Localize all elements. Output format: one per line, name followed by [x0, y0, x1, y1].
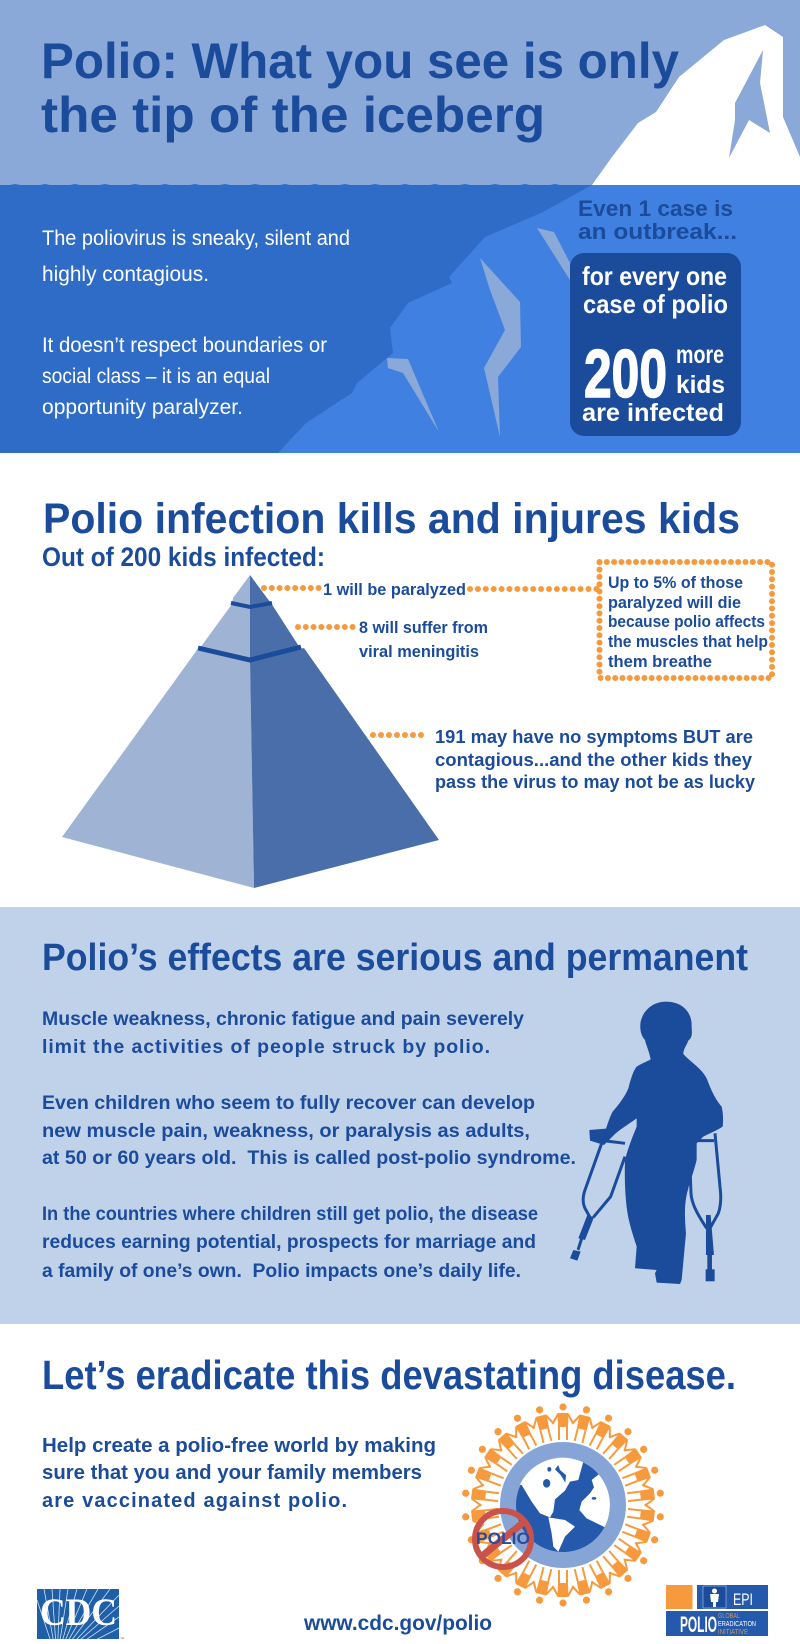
logo: polio eradication initiative — [666, 1585, 768, 1637]
action text — [42, 1435, 436, 1512]
logo: polio eradication initiative: ERADICATION — [718, 1619, 756, 1628]
subheading: Out of 200 kids infected: — [42, 542, 325, 572]
paragraph: weakness: limit the activities of people struck by polio. — [42, 1036, 490, 1058]
intro text: opportunity paralyzer. — [42, 396, 243, 419]
paragraph: daily life: reduces earning potential, prospects for marriage and — [42, 1231, 536, 1253]
panel: effects — [0, 907, 800, 1324]
callout: 200 more kids — [570, 253, 741, 436]
paragraph: weakness: Muscle weakness, chronic fatigue and pain severely — [42, 1008, 524, 1030]
ring of people — [461, 1403, 665, 1607]
callout: 200 more kids: are infected — [582, 399, 724, 427]
leader: 191 no symptoms — [373, 732, 429, 738]
paragraph: daily life — [42, 1203, 538, 1282]
paragraph: daily life: a family of one’s own. Polio impacts one’s daily life. — [42, 1260, 521, 1282]
intro text — [42, 227, 350, 419]
no polio sign — [475, 1511, 531, 1567]
action text: sure that you and your family members — [42, 1462, 422, 1484]
logo: CDC: CDC — [40, 1591, 117, 1634]
pyramid chart — [62, 575, 439, 888]
iceberg top crevice — [729, 50, 770, 158]
callout: 200 more kids: kids — [676, 371, 725, 399]
outbreak heading: Even 1 case is — [578, 196, 733, 221]
panel background — [0, 907, 800, 1324]
iceberg above water — [592, 25, 800, 185]
title: the tip of the iceberg — [41, 87, 545, 143]
callout: 200 more kids: more — [676, 341, 724, 369]
water background — [0, 185, 800, 453]
website url: www.cdc.gov/polio — [303, 1612, 492, 1635]
title: Polio: What you see is only — [41, 33, 679, 89]
logo: polio eradication initiative: GLOBAL — [718, 1611, 740, 1620]
outbreak heading — [578, 196, 737, 244]
callout: up to 5% will die: Up to 5% of those — [608, 573, 743, 592]
label: viral meningitis: viral meningitis — [359, 642, 479, 661]
label: 1 will be paralyzed: 1 will be paralyzed — [323, 580, 466, 599]
logo: CDC: ™ — [120, 1636, 124, 1641]
paragraph: post-polio syndrome: new muscle pain, weakness, or paralysis as adults, — [42, 1120, 530, 1142]
paragraph: post-polio syndrome: at 50 or 60 years old. This is called post-polio syndrome. — [42, 1147, 576, 1169]
leader to death box — [470, 586, 597, 592]
label: 191 no symptoms: contagious...and the other kids they — [435, 750, 752, 770]
action text: are vaccinated against polio. — [42, 1490, 347, 1512]
waterline ripples — [0, 184, 592, 186]
callout: 200 more kids: 200 — [584, 336, 667, 412]
outbreak heading: an outbreak... — [578, 219, 737, 244]
icon: child on crutches — [570, 1002, 723, 1284]
no polio sign: POLIO — [476, 1529, 530, 1548]
paragraph: post-polio syndrome: Even children who seem to fully recover can develop — [42, 1092, 535, 1114]
label: viral meningitis — [359, 618, 488, 661]
heading: Polio’s effects are serious and permanent — [42, 937, 748, 979]
callout: up to 5% will die: the muscles that help — [608, 632, 768, 651]
callout: 200 more kids: for every one — [582, 261, 727, 291]
label: 191 no symptoms — [435, 727, 755, 792]
heading: Polio infection kills and injures kids — [43, 495, 740, 543]
panel: iceberg header — [0, 0, 800, 453]
intro text: It doesn’t respect boundaries or — [42, 334, 327, 357]
callout: 200 more kids: case of polio — [583, 289, 728, 319]
intro text: social class – it is an equal — [42, 365, 270, 388]
callout: up to 5% will die: paralyzed will die — [608, 593, 741, 612]
globe ring — [508, 1450, 618, 1560]
panel: infection outcomes — [42, 495, 772, 888]
label: 191 no symptoms: 191 may have no symptoms BUT are — [435, 727, 753, 747]
intro text: The poliovirus is sneaky, silent and — [42, 227, 350, 250]
label: 191 no symptoms: pass the virus to may not be as lucky — [435, 772, 755, 792]
panel: call to action — [37, 1352, 768, 1644]
leader: 1 will be paralyzed — [264, 585, 319, 591]
title — [41, 33, 679, 143]
globe land — [520, 1458, 610, 1552]
leader: 8 will suffer — [298, 624, 353, 630]
paragraph: weakness — [42, 1008, 524, 1058]
paragraph: post-polio syndrome — [42, 1092, 576, 1169]
icon: people ring around globe — [461, 1403, 665, 1607]
logo: polio eradication initiative: EPI — [733, 1590, 753, 1609]
callout: up to 5% will die — [600, 562, 772, 678]
intro text: highly contagious. — [42, 263, 209, 286]
logo: polio eradication initiative: POLIO — [680, 1612, 717, 1637]
iceberg shards — [387, 228, 570, 437]
callout: up to 5% will die: them breathe — [608, 652, 712, 671]
iceberg underwater — [278, 185, 800, 453]
paragraph: daily life: In the countries where children still get polio, the disease — [42, 1203, 538, 1225]
action text: Help create a polio-free world by making — [42, 1435, 436, 1457]
label: viral meningitis: 8 will suffer from — [359, 618, 488, 637]
sky background — [0, 0, 800, 185]
logo: polio eradication initiative: INITIATIVE — [718, 1627, 748, 1636]
callout: up to 5% will die: because polio affects — [608, 612, 765, 631]
